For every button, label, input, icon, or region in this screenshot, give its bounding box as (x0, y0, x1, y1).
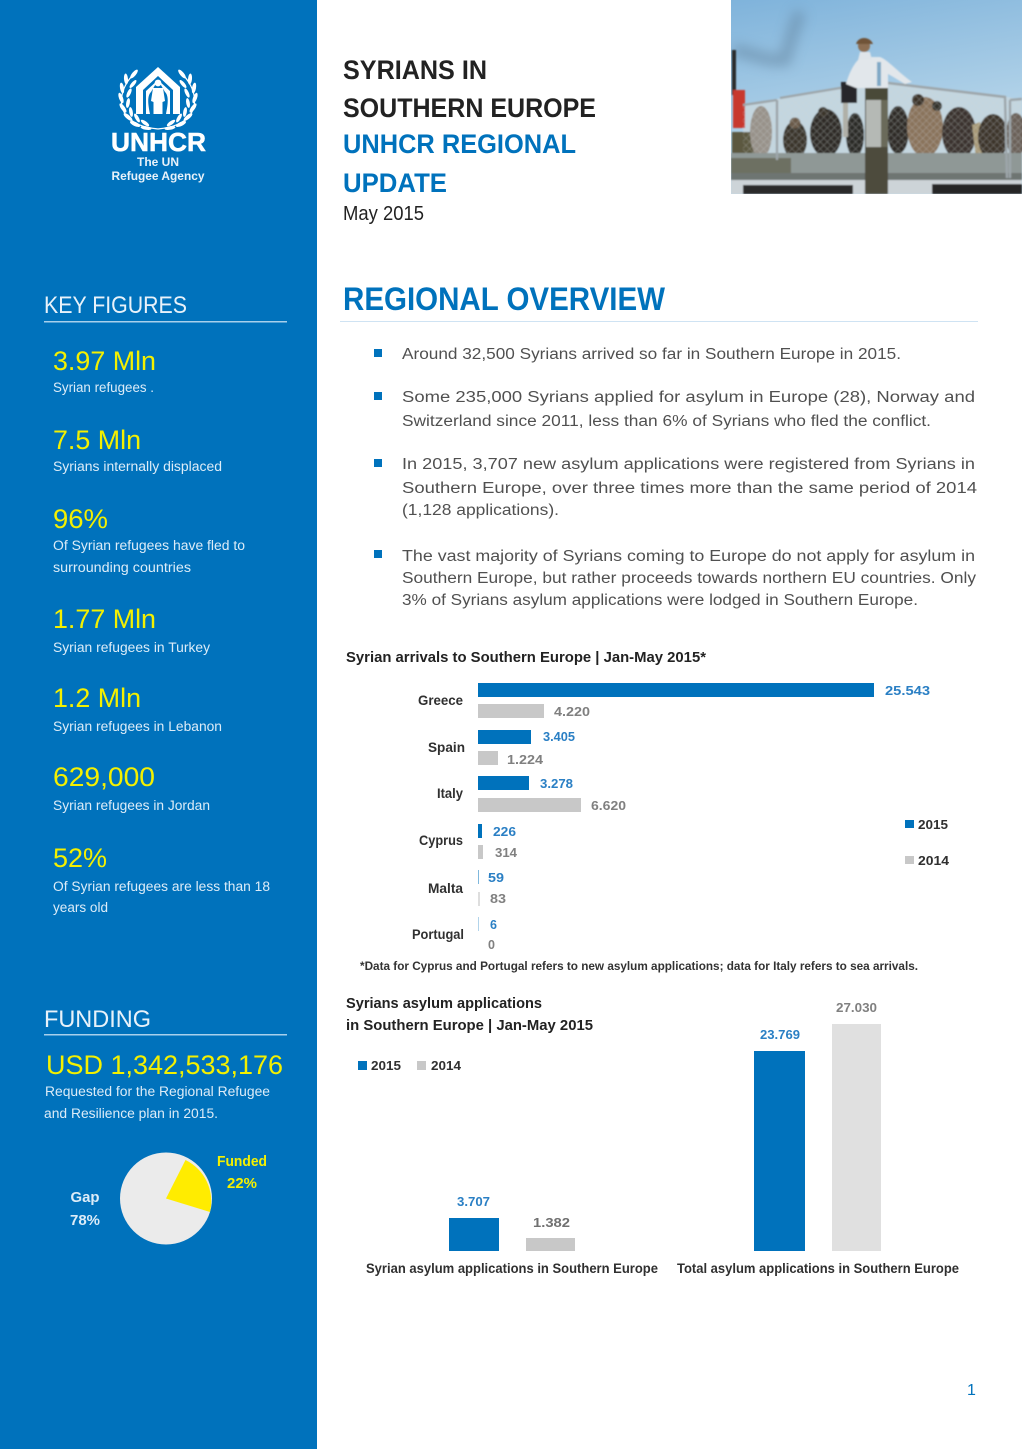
title: SOUTHERN EUROPE (343, 93, 596, 123)
key figure: surrounding countries: surrounding countries (53, 560, 191, 575)
2014 values: 314 (495, 846, 517, 860)
2015 values (488, 684, 930, 932)
group: total applications: 23.769 (760, 1028, 800, 1042)
2014 values (488, 705, 626, 952)
country labels: Greece (418, 693, 463, 708)
bullet 4: The vast majority of Syrians coming to Europe do not apply for asylum in (402, 548, 975, 565)
key figure: Syrian refugees: 3.97 Mln (53, 346, 156, 376)
standing man (846, 57, 912, 88)
UNHCR logo (111, 67, 206, 183)
2015 values: 3.278 (540, 777, 573, 791)
group: total applications (677, 1001, 959, 1276)
legend: asylum chart: 2014 (431, 1059, 461, 1073)
key figure: Jordan (53, 762, 210, 813)
bullet 2 (374, 389, 975, 430)
bullet 2: Switzerland since 2011, less than 6% of Syrians who fled the conflict. (402, 413, 931, 430)
title: SYRIANS IN (343, 55, 487, 85)
key figure: internally displaced: Syrians internally displaced (53, 459, 222, 474)
key figure: Syrian refugees: Syrian refugees . (53, 380, 154, 395)
country labels (412, 693, 465, 942)
key figure: Lebanon: 1.2 Mln (53, 683, 141, 713)
title (343, 55, 596, 198)
funding amount (44, 1050, 283, 1121)
logo wordmark: UNHCR (111, 127, 206, 157)
ship funnel and red cylinder (732, 50, 736, 95)
date: May 2015 (343, 203, 424, 225)
key figure: children (53, 843, 270, 915)
chart footnote: *Data for Cyprus and Portugal refers to new asylum applications; data for Italy refers to sea arrivals. (360, 961, 918, 973)
country labels: Cyprus (419, 833, 463, 848)
group: Syrian applications: 3.707 (457, 1195, 490, 1209)
fence rails (743, 83, 1022, 178)
bullet 3: (1,128 applications). (402, 502, 559, 519)
group: Syrian applications (366, 1195, 658, 1276)
2014 values: 4.220 (554, 705, 590, 719)
bundled rope column (865, 88, 888, 194)
deck wall (731, 153, 1022, 174)
country labels: Portugal (412, 927, 464, 942)
bullet 3: Southern Europe, over three times more than the same period of 2014 (402, 480, 977, 497)
2015 values: 226 (493, 825, 516, 839)
key figure: surrounding countries: Of Syrian refugees have fled to (53, 538, 245, 553)
sky seen through the fence (743, 83, 1022, 155)
key figure: Turkey: Syrian refugees in Turkey (53, 640, 210, 655)
key figure: Lebanon (53, 683, 222, 734)
photo: refugees on a ship deck (731, 0, 1024, 194)
2014 values: 0 (488, 938, 495, 952)
2015 values: 59 (488, 871, 504, 885)
hull (731, 180, 1022, 194)
group: total applications: Total asylum applications in Southern Europe (677, 1261, 959, 1276)
title: UNHCR REGIONAL (343, 129, 576, 159)
funding amount: and Resilience plan in 2015. (44, 1106, 218, 1121)
key figure: Turkey (53, 604, 210, 655)
page number: 1 (967, 1382, 976, 1399)
heading: asylum applications chart (346, 996, 593, 1034)
2015 bars (478, 683, 874, 931)
heading: key figures: KEY FIGURES (44, 292, 187, 319)
2014 values: 1.224 (507, 753, 543, 767)
section heading: regional overview: REGIONAL OVERVIEW (343, 281, 666, 317)
heading: arrivals chart: Syrian arrivals to Southern Europe | Jan-May 2015* (346, 650, 706, 666)
title: UPDATE (343, 168, 447, 198)
key figure: Turkey: 1.77 Mln (53, 604, 156, 634)
logo tagline (112, 155, 205, 183)
key figure: children: years old (53, 900, 108, 915)
dark cloth on rail (841, 82, 857, 103)
pie chart: funded vs gap (70, 1152, 267, 1244)
2014 bars (478, 704, 581, 906)
legend: asylum chart: 2015 (371, 1059, 401, 1073)
legend (905, 818, 949, 868)
heading: asylum applications chart: Syrians asylum applications (346, 996, 542, 1012)
group: Syrian applications: Syrian asylum applications in Southern Europe (366, 1261, 658, 1276)
key figure: surrounding countries: 96% (53, 504, 108, 534)
country labels: Spain (428, 740, 465, 755)
2015 values: 25.543 (885, 684, 930, 698)
funding amount: Requested for the Regional Refugee (45, 1084, 270, 1099)
heading: asylum applications chart: in Southern Europe | Jan-May 2015 (346, 1018, 593, 1034)
crowd (732, 94, 1024, 160)
label: gap (70, 1190, 100, 1229)
key figure: Lebanon: Syrian refugees in Lebanon (53, 719, 222, 734)
legend: 2014 (918, 854, 949, 868)
label: gap: 78% (70, 1213, 100, 1229)
bullet 1: Around 32,500 Syrians arrived so far in Southern Europe in 2015. (402, 346, 901, 363)
label: gap: Gap (70, 1190, 100, 1206)
bullet list (374, 346, 977, 609)
funding amount: USD 1,342,533,176 (46, 1050, 283, 1080)
heading: funding: FUNDING (44, 1006, 151, 1033)
bullet 4 (374, 548, 976, 609)
key figure: children: 52% (53, 843, 107, 873)
legend: 2015 (918, 818, 948, 832)
group: Syrian applications: 1.382 (533, 1216, 570, 1230)
country labels: Italy (437, 786, 463, 801)
group: total applications: 27.030 (836, 1001, 877, 1015)
2014 values: 83 (490, 892, 506, 906)
bullet 3 (374, 456, 977, 519)
icon: sheltering hands and laurel (117, 67, 199, 131)
bullet 4: Southern Europe, but rather proceeds towards northern EU countries. Only (402, 570, 976, 587)
bar chart: arrivals by country (412, 683, 949, 952)
key figure: children: Of Syrian refugees are less than 18 (53, 879, 270, 894)
label: funded: 22% (227, 1176, 257, 1192)
bullet 4: 3% of Syrians asylum applications were lodged in Southern Europe. (402, 592, 918, 609)
country labels: Malta (428, 881, 463, 896)
logo tagline: Refugee Agency (112, 169, 205, 183)
sidebar panel (0, 0, 317, 1449)
key figure: internally displaced (53, 425, 222, 474)
label: funded: Funded (217, 1154, 267, 1170)
key figure: Syrian refugees (53, 346, 156, 395)
key figure: Jordan: Syrian refugees in Jordan (53, 798, 210, 813)
legend: asylum chart (358, 1059, 461, 1073)
bullet 3: In 2015, 3,707 new asylum applications were registered from Syrians in (402, 456, 975, 473)
2014 values: 6.620 (591, 799, 626, 813)
chain-link mesh (742, 94, 1022, 154)
label: funded (217, 1154, 267, 1192)
key figure: Jordan: 629,000 (53, 762, 155, 792)
key figure: surrounding countries (53, 504, 245, 575)
key figure: internally displaced: 7.5 Mln (53, 425, 141, 455)
2015 values: 6 (490, 918, 497, 932)
bar chart: asylum applications (366, 1001, 959, 1276)
logo tagline: The UN (137, 155, 179, 169)
2015 values: 3.405 (543, 730, 575, 744)
bullet 2: Some 235,000 Syrians applied for asylum in Europe (28), Norway and (402, 389, 975, 406)
